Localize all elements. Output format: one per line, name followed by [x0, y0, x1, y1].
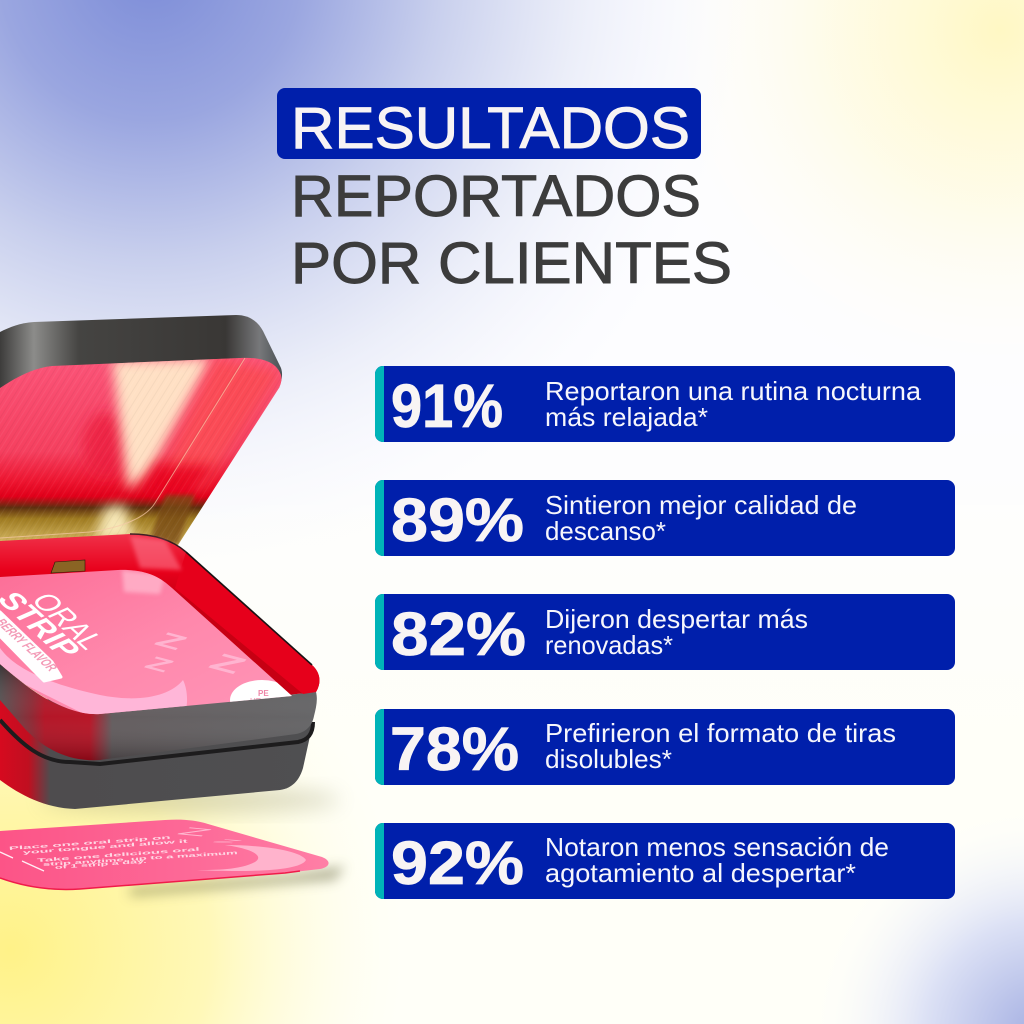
pink pad: HE — [250, 697, 261, 706]
strip crescent — [197, 845, 306, 871]
lid outer edge — [0, 315, 282, 400]
stat value: 82% — [391, 600, 526, 668]
pad Z letters: Z — [149, 628, 193, 655]
stat card 1 — [375, 366, 955, 442]
stat description: disolubles* — [545, 744, 672, 774]
strip instruction dashes — [0, 852, 44, 871]
pink pad: Z — [139, 653, 178, 676]
strip instructions: Take one delicious oral — [37, 847, 200, 864]
strip Z marks — [172, 825, 247, 844]
stat description: renovadas* — [545, 630, 673, 660]
pink pad — [0, 570, 292, 714]
lower tin wall — [0, 695, 313, 809]
stat value: 78% — [390, 715, 519, 783]
title line 2: REPORTADOS — [291, 164, 701, 229]
strip instructions: Place one oral strip on — [9, 835, 172, 852]
hinge clip — [51, 560, 85, 573]
strip instructions — [9, 835, 238, 871]
seam between walls — [0, 720, 313, 764]
stat card 4 — [375, 709, 955, 785]
pad flavour pill — [0, 612, 61, 681]
pink pad: PE — [258, 689, 269, 698]
strip instructions: of 1 strip a day. — [55, 859, 148, 871]
strip Z marks: Z — [172, 825, 217, 839]
stat card 5 — [375, 823, 955, 899]
pad text: ORAL: ORAL — [24, 588, 113, 654]
stat description: Notaron menos sensación de — [545, 832, 889, 862]
stat description: Reportaron una rutina nocturna — [545, 376, 922, 406]
strip instructions: your tongue and allow it — [23, 839, 188, 856]
title — [277, 88, 732, 296]
stat description: más relajada* — [545, 402, 708, 432]
pink pad: Z — [202, 649, 253, 679]
title highlight box — [277, 88, 701, 159]
stat description: descanso* — [545, 516, 666, 546]
stat value: 92% — [391, 829, 524, 897]
title line 3: POR CLIENTES — [291, 231, 732, 296]
upper tin wall — [0, 664, 317, 760]
strip instructions: strip anytime, up to a maximum — [43, 851, 238, 868]
stat card 3 — [375, 594, 955, 670]
stat description: Dijeron despertar más — [545, 604, 808, 634]
product illustration: open tin and strip — [0, 315, 345, 896]
tin red inner rim — [0, 534, 319, 714]
stat description: agotamiento al despertar* — [545, 858, 856, 888]
strip Z marks: Z — [208, 838, 247, 844]
stat description: Prefirieron el formato de tiras — [545, 718, 896, 748]
floating strip shadow — [130, 866, 345, 896]
floating strip — [0, 820, 329, 889]
stat value: 89% — [391, 486, 524, 554]
stat value: 91% — [391, 372, 503, 440]
title line 1: RESULTADOS — [291, 96, 690, 161]
tin shadow — [40, 787, 340, 813]
lid inner metal — [0, 350, 290, 550]
pad badge — [230, 680, 292, 702]
pad crescent — [0, 648, 187, 714]
stat description: Sintieron mejor calidad de — [545, 490, 857, 520]
stat card 2 — [375, 480, 955, 556]
